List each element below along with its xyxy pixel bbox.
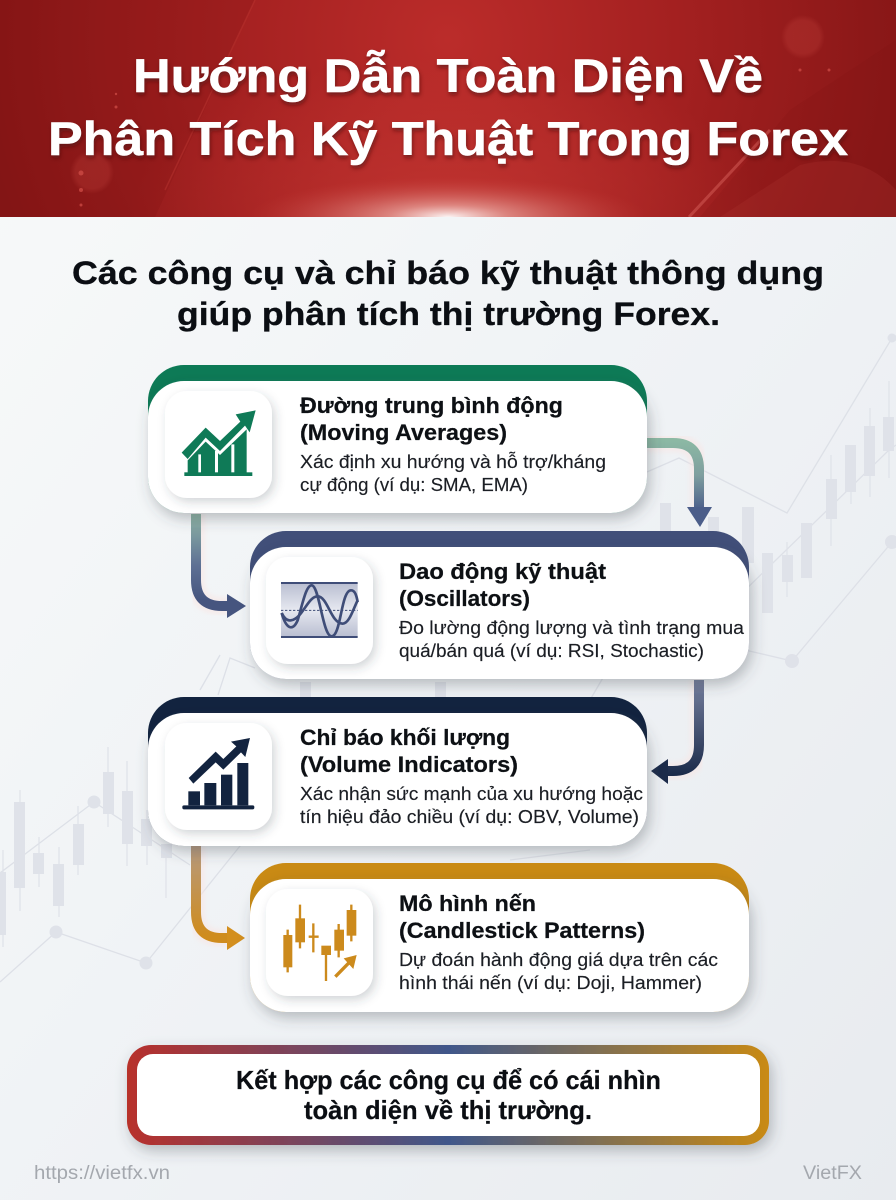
description: oscillators: Đo lường động lượng và tình trạng mua xyxy=(399,617,745,638)
subtitle xyxy=(72,255,824,332)
subheading: volume indicators: (Volume Indicators) xyxy=(300,752,518,777)
arrow: moving averages to oscillators, left path xyxy=(196,514,246,618)
heading: oscillators: Dao động kỹ thuật xyxy=(399,559,607,584)
footer url: https://vietfx.vn xyxy=(34,1163,170,1184)
panel: moving averages xyxy=(148,365,647,513)
subheading: moving averages: (Moving Averages) xyxy=(300,420,507,445)
callout: conclusion xyxy=(127,1045,769,1145)
description: moving averages: Xác định xu hướng và hỗ trợ/kháng xyxy=(300,451,606,472)
title: Hướng Dẫn Toàn Diện Về xyxy=(133,49,763,102)
description: moving averages xyxy=(300,451,606,495)
heading: volume indicators: Chỉ báo khối lượng xyxy=(300,725,510,750)
heading: candlestick patterns: Mô hình nến xyxy=(399,891,536,916)
panel: candlestick patterns xyxy=(250,863,749,1012)
subtitle: Các công cụ và chỉ báo kỹ thuật thông dụng xyxy=(72,255,824,291)
heading: moving averages: Đường trung bình động xyxy=(300,393,563,418)
description: moving averages: cự động (ví dụ: SMA, EMA) xyxy=(300,474,528,495)
icon: volume bars xyxy=(182,738,254,809)
panel: oscillators xyxy=(250,531,749,679)
footer brand: VietFX xyxy=(803,1163,862,1184)
description: oscillators: quá/bán quá (ví dụ: RSI, Stochastic) xyxy=(399,640,704,661)
background chart decoration xyxy=(0,334,896,982)
header banner xyxy=(0,0,896,217)
description: oscillators xyxy=(399,617,745,661)
description: candlestick patterns: hình thái nến (ví dụ: Doji, Hammer) xyxy=(399,972,702,993)
title xyxy=(48,49,848,165)
callout: conclusion: Kết hợp các công cụ để có cái nhìn xyxy=(236,1065,661,1095)
description: volume indicators xyxy=(300,783,643,827)
arrow: oscillators to volume indicators xyxy=(651,680,699,784)
icon: rising chart xyxy=(182,410,256,476)
description: candlestick patterns: Dự đoán hành động giá dựa trên các xyxy=(399,949,718,970)
description: candlestick patterns xyxy=(399,949,718,993)
icon: candlesticks xyxy=(283,905,357,981)
arrow: volume indicators to candlestick patterns xyxy=(196,846,245,950)
icon: oscillator waves xyxy=(281,583,358,637)
callout: conclusion: toàn diện về thị trường. xyxy=(304,1095,592,1125)
title: Phân Tích Kỹ Thuật Trong Forex xyxy=(48,112,848,165)
subheading: oscillators: (Oscillators) xyxy=(399,586,530,611)
description: volume indicators: Xác nhận sức mạnh của xu hướng hoặc xyxy=(300,783,643,804)
description: volume indicators: tín hiệu đảo chiều (ví dụ: OBV, Volume) xyxy=(300,806,639,827)
panel: volume indicators xyxy=(148,697,647,846)
arrow: moving averages to oscillators xyxy=(647,443,712,527)
subtitle: giúp phân tích thị trường Forex. xyxy=(177,296,720,332)
subheading: candlestick patterns: (Candlestick Patterns) xyxy=(399,918,645,943)
